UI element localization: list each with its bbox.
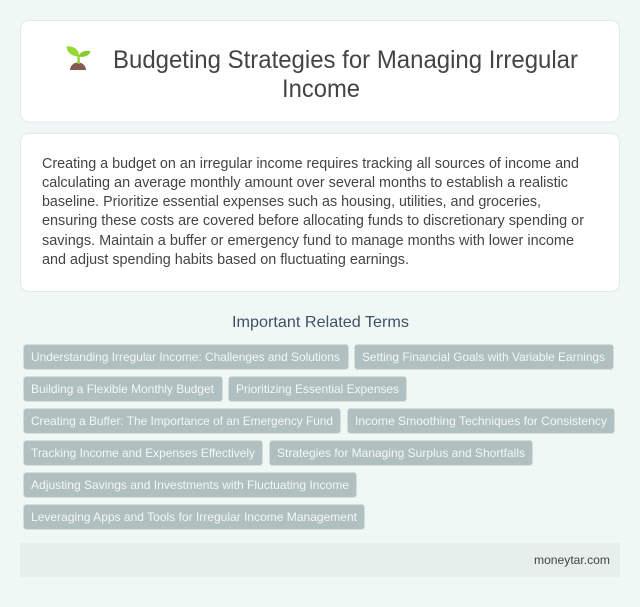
panel: title card — [20, 20, 620, 122]
tag: Strategies for Managing Surplus and Shortfalls — [277, 446, 525, 460]
text block: description: ensuring these costs are covered before allocating funds to discretionary spending or — [42, 213, 584, 229]
text block: description: baseline. Prioritize essential expenses such as housing, utilities, and groceries, — [42, 194, 541, 210]
text block: description: savings. Maintain a buffer or emergency fund to manage months with lower income — [42, 233, 574, 249]
tag — [228, 376, 406, 402]
tag — [24, 440, 262, 466]
tag — [24, 408, 340, 434]
tag: Income Smoothing Techniques for Consistency — [355, 414, 607, 428]
footer: moneytar.com — [534, 553, 610, 567]
tag: Adjusting Savings and Investments with Fluctuating Income — [31, 478, 349, 492]
tag — [348, 408, 614, 434]
title: Budgeting Strategies for Managing Irregular — [113, 46, 578, 74]
icon: sprout — [66, 46, 90, 70]
tag list — [24, 344, 614, 530]
tag: Creating a Buffer: The Importance of an Emergency Fund — [31, 414, 333, 428]
title: Income — [282, 75, 360, 103]
text block: description: and adjust spending habits based on fluctuating earnings. — [42, 252, 409, 268]
title — [113, 46, 578, 103]
tag: Setting Financial Goals with Variable Earnings — [362, 350, 605, 364]
tag: Understanding Irregular Income: Challenges and Solutions — [31, 350, 340, 364]
tag — [24, 344, 348, 370]
heading: related terms: Important Related Terms — [232, 314, 409, 331]
text block: description: Creating a budget on an irregular income requires tracking all sources of income and — [42, 156, 579, 172]
tag: Building a Flexible Monthly Budget — [31, 382, 215, 396]
tag — [354, 344, 614, 370]
tag: Tracking Income and Expenses Effectively — [31, 446, 255, 460]
panel: description — [20, 134, 620, 292]
text block: description: calculating an average monthly amount over several months to establish a realistic — [42, 175, 568, 191]
text block: description — [42, 156, 584, 268]
footer — [20, 543, 620, 577]
tag: Prioritizing Essential Expenses — [236, 382, 399, 396]
tag — [24, 472, 356, 498]
tag: Leveraging Apps and Tools for Irregular Income Management — [31, 510, 358, 524]
tag — [24, 504, 364, 530]
tag — [270, 440, 532, 466]
tag — [24, 376, 222, 402]
